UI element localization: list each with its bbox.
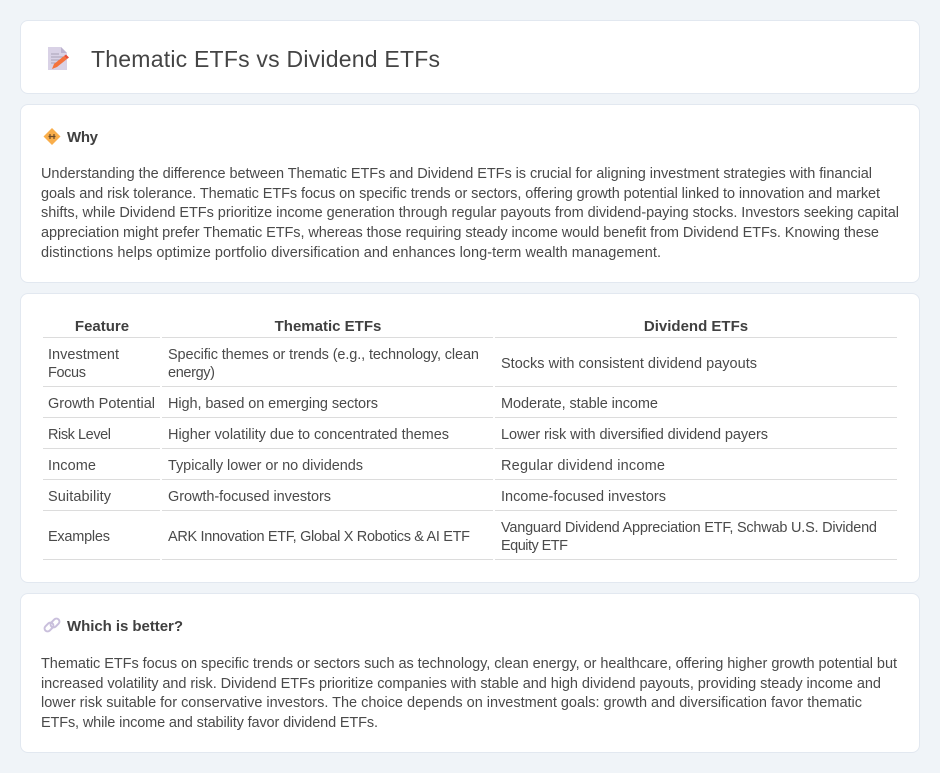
- panel: which is better card: [20, 593, 920, 753]
- row: growth potential: [48, 396, 658, 412]
- title: Thematic ETFs vs Dividend ETFs: [91, 46, 440, 72]
- row: income: [48, 458, 665, 474]
- row: risk level: Higher volatility due to concentrated themes: [168, 427, 449, 443]
- row: investment focus: energy): [168, 365, 215, 381]
- text block: why: goals and risk tolerance. Thematic ETFs focus on specific trends or sectors, offering growth potential linked to innovation and market: [41, 186, 880, 202]
- row: suitability: Income-focused investors: [501, 489, 666, 505]
- row: risk level: [48, 427, 768, 443]
- row: examples: Equity ETF: [501, 538, 568, 554]
- text block: which is better: [41, 656, 897, 731]
- row: examples: [48, 520, 877, 554]
- table header: [75, 318, 748, 335]
- row: income: Typically lower or no dividends: [168, 458, 363, 474]
- text block: which is better: lower risk suitable for conservative investors. The choice depends on investment goals: growth and diversification favor thematic: [41, 695, 862, 711]
- icon: document with pencil: [48, 47, 69, 70]
- text block: why: distinctions helps optimize portfolio diversification and enhances long-term wealth management.: [41, 245, 661, 261]
- text block: why: shifts, while Dividend ETFs prioritize income generation through regular payouts from dividend-paying stocks. Investors seeking capital: [41, 205, 899, 221]
- text block: which is better: Thematic ETFs focus on specific trends or sectors such as technology, clean energy, or healthcare, offering higher growth potential but: [41, 656, 897, 672]
- row: risk level: Risk Level: [48, 427, 111, 443]
- row: suitability: [48, 489, 666, 505]
- text block: which is better: ETFs, while income and stability favor dividend ETFs.: [41, 715, 378, 731]
- table header: Dividend ETFs: [644, 318, 748, 335]
- text block: which is better: increased volatility and risk. Dividend ETFs prioritize companies with stable and high dividend payouts, providing steady income and: [41, 676, 881, 692]
- row: investment focus: Focus: [48, 365, 86, 381]
- icon: chain link: [43, 617, 61, 633]
- row: investment focus: Investment: [48, 347, 119, 363]
- row: risk level: Lower risk with diversified dividend payers: [501, 427, 768, 443]
- panel: why card: [20, 104, 920, 283]
- row: income: Regular dividend income: [501, 458, 665, 474]
- comparison table: [43, 318, 897, 560]
- row: examples: Vanguard Dividend Appreciation ETF, Schwab U.S. Dividend: [501, 520, 877, 536]
- row: examples: ARK Innovation ETF, Global X Robotics & AI ETF: [168, 529, 470, 545]
- row: suitability: Growth-focused investors: [168, 489, 331, 505]
- panel: comparison table card: [20, 293, 920, 583]
- row: suitability: Suitability: [48, 489, 112, 505]
- row: investment focus: [48, 347, 757, 381]
- row: investment focus: Specific themes or trends (e.g., technology, clean: [168, 347, 479, 363]
- text block: why: [41, 166, 899, 261]
- heading: which is better: Which is better?: [67, 618, 183, 635]
- row: growth potential: Growth Potential: [48, 396, 155, 412]
- row: income: Income: [48, 458, 96, 474]
- table header: Thematic ETFs: [275, 318, 381, 335]
- heading: why: Why: [67, 129, 99, 146]
- row: growth potential: High, based on emerging sectors: [168, 396, 378, 412]
- panel: title card: [20, 20, 920, 94]
- row: examples: Examples: [48, 529, 110, 545]
- table header: Feature: [75, 318, 129, 335]
- text block: why: appreciation might prefer Thematic ETFs, whereas those requiring steady income would benefit from Dividend ETFs. Knowing these: [41, 225, 879, 241]
- text block: why: Understanding the difference between Thematic ETFs and Dividend ETFs is crucial for aligning investment strategies with financial: [41, 166, 872, 182]
- row: investment focus: Stocks with consistent dividend payouts: [501, 356, 757, 372]
- row: growth potential: Moderate, stable income: [501, 396, 658, 412]
- icon: warning diamond: [44, 128, 60, 145]
